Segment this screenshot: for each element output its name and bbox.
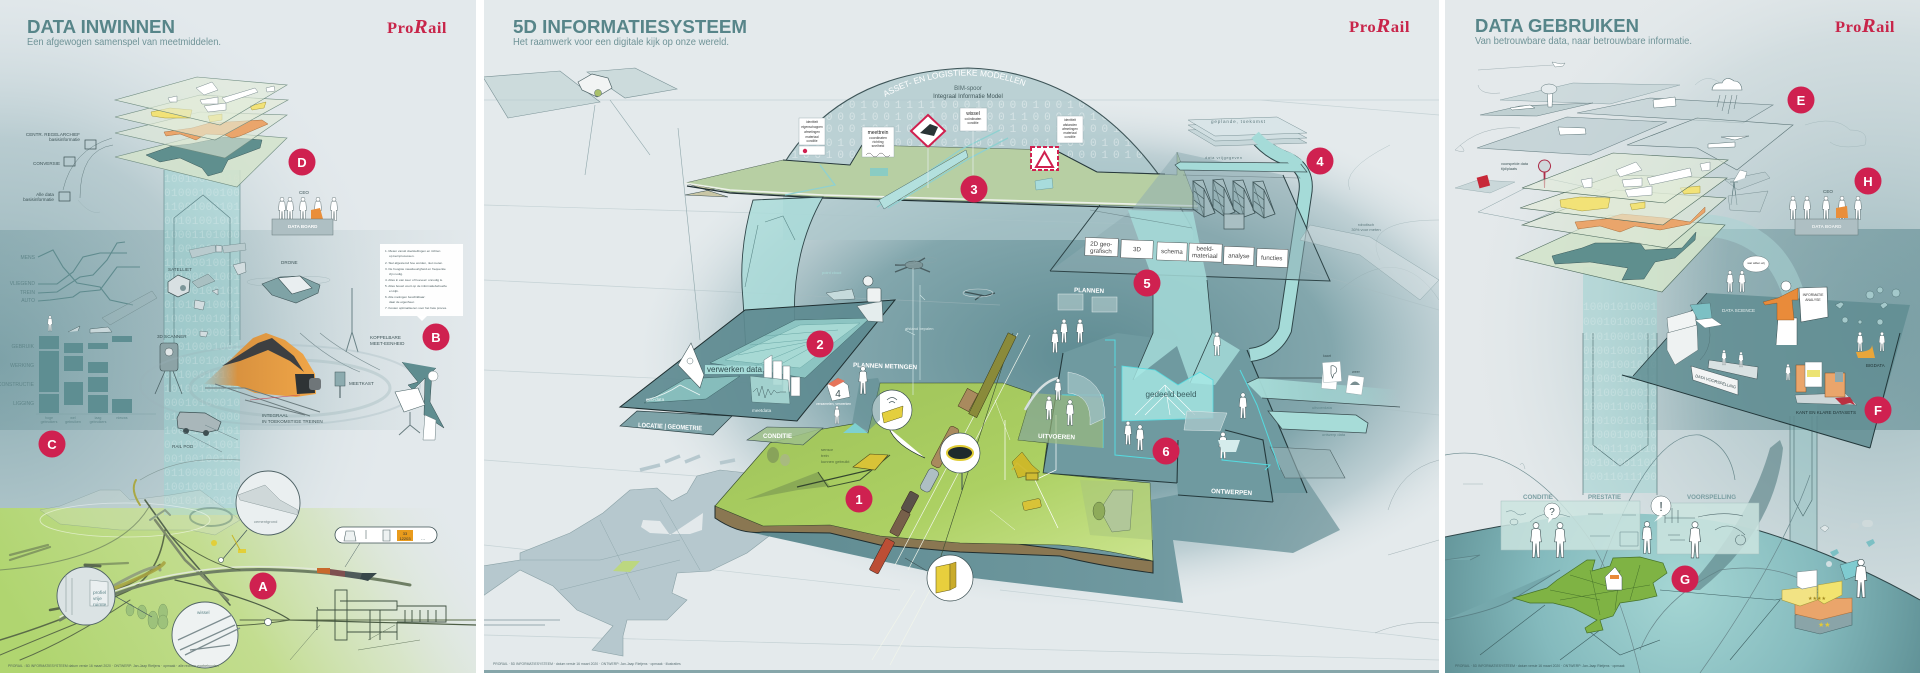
junction dot xyxy=(264,618,272,626)
note card: 1. Meten vanuit doelstellingen en richten xyxy=(385,249,441,253)
badge B: B xyxy=(431,330,441,345)
badge F: F xyxy=(1874,403,1882,418)
map and weather cards xyxy=(1321,354,1364,395)
city sketch xyxy=(40,490,240,537)
data board xyxy=(1789,189,1862,235)
icon: hazard diamond xyxy=(911,115,945,188)
bubble: question: ? xyxy=(1549,507,1555,518)
koppelbare meeteenheid: KOPPELBARE xyxy=(370,335,401,340)
panel: data gebruiken xyxy=(1445,0,1920,673)
magnifier: switch: wissel xyxy=(197,610,210,615)
bar chart: nieuws xyxy=(116,416,128,420)
shared picture zone xyxy=(1122,366,1227,431)
badge G: G xyxy=(1680,572,1690,587)
representation cards: schema xyxy=(1161,248,1183,256)
plannen group: PLANNEN xyxy=(1074,287,1105,295)
note card xyxy=(380,244,463,321)
badge D xyxy=(288,148,316,176)
ontwerpen: ONTWERPEN xyxy=(1211,488,1253,497)
dome with binary code: 1001000100100100100011000101001000101 xyxy=(780,112,1200,124)
icon: warning sign xyxy=(1031,147,1058,190)
bar chart: GEBRUIK xyxy=(11,344,35,350)
people at panels xyxy=(1531,522,1701,558)
uitvoeren: UITVOEREN xyxy=(1038,433,1076,441)
footer credit right: PRORAIL · 5D INFORMATIESYSTEEM · datum versie 16 maart 2020 · ONTWERP: Jan-Jaap Rietjens · opmaak xyxy=(1455,664,1625,668)
people in plan area xyxy=(1124,332,1270,470)
conversion sketch: basisinformatie xyxy=(49,137,80,142)
note card: 2. Stel afgestemd hoe worden, niet meten. xyxy=(385,261,443,265)
logo: prorail: ProRail xyxy=(1349,15,1410,37)
plan tiles area xyxy=(1043,333,1345,502)
title: data inwinnen: DATA INWINNEN xyxy=(27,16,175,37)
card: generic asset: afmetingen xyxy=(804,130,820,134)
sketches right xyxy=(1300,145,1439,633)
data columns: 10001010001 xyxy=(1583,302,1657,314)
data columns: 10000100010 xyxy=(1583,430,1657,442)
meetkast xyxy=(335,372,374,398)
dome with binary code: 0100100010010001011010001000101000110 xyxy=(780,150,1200,162)
ribbon 4 xyxy=(1250,136,1306,355)
data column with binary code: 01010010001 xyxy=(164,300,240,312)
terrain block: kunnen gebruikt xyxy=(821,459,850,464)
trees xyxy=(126,604,168,629)
badge 6: 6 xyxy=(1162,444,1170,459)
magnifier: profile xyxy=(57,567,152,625)
badge 4: 4 xyxy=(1316,154,1324,169)
data board xyxy=(272,190,338,235)
badge H: H xyxy=(1863,174,1873,189)
data column with binary code: 10001101000 xyxy=(164,230,240,242)
badge F xyxy=(1864,396,1892,424)
netherlands map ground xyxy=(483,456,773,656)
badge E xyxy=(1788,86,1814,114)
subtitle: data gebruiken: Van betrouwbare data, naar betrouwbare informatie. xyxy=(1475,35,1692,47)
data column with binary code: 00101010010 xyxy=(164,496,240,508)
location pin label: voorspelde data xyxy=(1501,162,1529,166)
data columns: 10010001001 xyxy=(1583,332,1657,344)
card: wissel: wissel xyxy=(966,111,980,117)
plate 2: processing: LOCATIE | GEOMETRIE xyxy=(638,422,703,432)
card: object details: materiaal xyxy=(1063,131,1077,135)
second drone xyxy=(963,289,995,300)
data columns: 00101001100 xyxy=(1583,458,1657,470)
data column with binary code: 01000100100 xyxy=(164,188,240,200)
conductor xyxy=(395,362,444,440)
data column with binary code: 10001000101 xyxy=(164,426,240,438)
badge C xyxy=(38,430,66,458)
terrain shadow xyxy=(740,470,1340,603)
data columns: 00001000101 xyxy=(1583,346,1657,358)
right arrow bars: ontwerp data xyxy=(1322,432,1346,437)
representation cards xyxy=(1085,237,1288,268)
card: object details: identiteit xyxy=(1064,118,1076,122)
representation cards: functies xyxy=(1261,255,1283,262)
left arrow of ribbon 4 xyxy=(1175,135,1307,172)
note card: 5. Alles bouwt voort op de informatiebehoefte xyxy=(385,284,447,288)
lego stack: ★★★★ xyxy=(1808,596,1826,602)
magnifier: soil xyxy=(218,471,300,562)
dome with binary code: 0101000100111100010000100100001001001 xyxy=(780,100,1200,112)
data columns: 10001100010 xyxy=(1583,402,1657,414)
line chart: VLIEGEND xyxy=(10,281,35,287)
note card: 7. Kosten optimaliseren voor het hele proces. xyxy=(385,306,447,310)
representation cards: analyse xyxy=(1228,252,1250,260)
dome heading: BIM-spoor xyxy=(954,86,982,92)
data columns: 10001001010 xyxy=(1583,360,1657,372)
data column with binary code: 01100001000 xyxy=(164,468,240,480)
card: generic asset xyxy=(799,118,825,155)
card: generic asset: materiaal xyxy=(805,135,819,139)
data column with binary code: 01001000101 xyxy=(164,244,240,256)
data columns: 01001110110 xyxy=(1583,444,1657,456)
drone: DRONE xyxy=(281,260,298,265)
data voorspelling desk: DATA VOORSPELLING xyxy=(1695,373,1737,390)
data columns: 00010100010 xyxy=(1583,317,1657,329)
data column with binary code: 00100011001 xyxy=(164,272,240,284)
plannen metingen: PLANNEN METINGEN xyxy=(853,362,917,371)
small towers xyxy=(1725,170,1770,212)
analysis panels: VOORSPELLING xyxy=(1687,494,1736,501)
track and train xyxy=(869,333,1030,665)
data column with binary code: 00100100011 xyxy=(164,328,240,340)
stacked documents xyxy=(1667,310,1698,365)
note card: 4. Alles in één keer of hoeveel: onnodig is. xyxy=(385,278,443,282)
data column with binary code: 00100010100 xyxy=(164,370,240,382)
bubble: exclamation xyxy=(1651,496,1671,522)
layered data stack xyxy=(115,77,288,187)
presenter: ANALYSE xyxy=(1805,298,1821,302)
magnifier: switch xyxy=(172,602,240,668)
plate 2: processing xyxy=(620,300,895,445)
card: generic asset: conditie xyxy=(806,139,818,143)
bubble: question xyxy=(1544,503,1560,523)
dome with binary code: 0001000101100100010010001000010010010 xyxy=(780,124,1200,136)
context data planes xyxy=(1455,62,1866,222)
conversion sketch xyxy=(23,132,113,212)
right arrow bars xyxy=(1247,378,1400,437)
sketches right: 30% voor meten xyxy=(1351,227,1381,232)
line chart: MENS xyxy=(21,255,36,261)
magnifier: profile: ruimte xyxy=(93,602,107,608)
badge 1 xyxy=(846,486,872,512)
location pin label xyxy=(1501,160,1550,188)
big data people: BIGDATA xyxy=(1866,363,1885,368)
data column with binary code: 11000100101 xyxy=(164,286,240,298)
plate 5: representation xyxy=(1050,152,1330,385)
note card: zijn nodig. xyxy=(389,272,403,276)
sensor legend pill: 12203 xyxy=(399,536,411,541)
dome with binary code: 1010010010001001000100011000101010001 xyxy=(780,138,1200,150)
terrain block: trein xyxy=(821,453,829,458)
badge E: E xyxy=(1797,93,1806,108)
data column with binary code: 10010001100 xyxy=(164,482,240,494)
subtitle: data inwinnen: Een afgewogen samenspel van meetmiddelen. xyxy=(27,36,221,48)
card: wissel: coördinaten xyxy=(965,117,982,121)
satellite xyxy=(483,68,700,340)
layered data stack xyxy=(1516,153,1728,292)
location pin label: tijd/plaats xyxy=(1501,167,1517,171)
bar chart: hoge xyxy=(45,416,53,420)
rail pod xyxy=(172,412,238,452)
logo: prorail: ProRail xyxy=(387,16,447,38)
robot and drone: afstand bepalen xyxy=(905,326,933,331)
3d scanner: 3D SCANNER xyxy=(157,334,187,339)
bar chart: LIGGING xyxy=(13,401,34,407)
representation cards: grafisch xyxy=(1090,248,1112,255)
magnifier: profile: vrije xyxy=(93,596,102,602)
dome with binary code xyxy=(780,68,1200,240)
note card: en kijk. xyxy=(389,289,399,293)
sensor legend pill: ... xyxy=(421,536,425,542)
use plate xyxy=(1622,256,1910,448)
subtitle: 5d informatiesysteem: Het raamwerk voor een digitale kijk op onze wereld. xyxy=(513,36,729,48)
robot and drone: point cloud xyxy=(822,270,841,275)
plate 2: processing: CONDITIE xyxy=(763,433,793,440)
right arrow bars: uitvoerdata xyxy=(1312,405,1333,410)
representation cards: 2D geo- xyxy=(1090,241,1112,248)
plate 2: processing: verwerken data xyxy=(707,365,763,374)
data column with binary code: 00100100101 xyxy=(164,454,240,466)
card: object details: afstanden xyxy=(1063,123,1077,127)
card: meettrein: coordinaten xyxy=(869,136,887,140)
badge 2 xyxy=(806,330,834,358)
uitvoeren xyxy=(1018,372,1105,448)
card: wissel xyxy=(960,108,987,175)
card: generic asset: identiteit xyxy=(806,120,818,124)
dome heading: Integraal Informatie Model xyxy=(933,94,1003,100)
ready datasets: KANT EN KLARE DATASETS xyxy=(1796,410,1856,415)
label: data science: DATA SCIENCE xyxy=(1722,308,1755,313)
bar chart: gebruiken xyxy=(65,420,81,424)
conversion sketch: Alle data xyxy=(36,192,54,197)
badge H xyxy=(1854,168,1882,194)
data column with binary code: 10010001001 xyxy=(164,342,240,354)
badge 3 xyxy=(960,176,988,202)
card: wissel: conditie xyxy=(968,121,979,125)
presenter: INFORMATIE xyxy=(1803,293,1824,297)
data board: DATA BOARD xyxy=(288,224,318,229)
bar chart xyxy=(0,316,156,424)
ready datasets xyxy=(1786,362,1857,415)
laptop xyxy=(1690,303,1722,328)
data column with binary code: 10001001010 xyxy=(164,314,240,326)
card: object details: afmetingen xyxy=(1062,127,1078,131)
left arch ribbon xyxy=(742,197,823,350)
conversion sketch: CONVERSIE xyxy=(33,161,60,166)
satellite: SATELLIET xyxy=(168,267,192,272)
line chart xyxy=(10,242,140,305)
badge 5 xyxy=(1134,270,1160,296)
plannen metingen: verzamelen, verwerken xyxy=(816,402,851,406)
badge 6 xyxy=(1152,438,1180,464)
map and weather cards: weer xyxy=(1352,370,1361,374)
panel: 5d informatiesysteem xyxy=(484,0,1439,673)
card: meettrein xyxy=(862,127,894,157)
card: object details xyxy=(1057,116,1083,143)
panel: data inwinnen xyxy=(0,0,476,673)
data column with binary code: 00010100010 xyxy=(164,398,240,410)
koppelbare meeteenheid: MEET-EENHEID xyxy=(370,341,405,346)
note card: 3. De hoogste nauwkeurigheid en frequentie xyxy=(385,267,446,271)
small yellow machines xyxy=(211,535,246,553)
data columns: 01000100111 xyxy=(1583,374,1657,386)
lego stack: ★★ xyxy=(1818,621,1831,629)
data column with binary code: 00101001001 xyxy=(164,216,240,228)
data column with binary code xyxy=(164,170,240,515)
big data social icons xyxy=(1835,287,1900,325)
analysis panels: CONDITIE xyxy=(1523,494,1554,501)
badge B xyxy=(422,324,450,350)
terrain block: sensor xyxy=(821,447,834,452)
footer credit left: PRORAIL : 5D INFORMATIESYSTEEM datum versie 16 maart 2020 · ONTWERP: Jan-Jaap Rietjens · opmaak · alle rechten voorbehouden xyxy=(8,664,219,668)
note card: daar de eigenheer. xyxy=(389,300,415,304)
robot and drone xyxy=(822,257,937,395)
data arch ribbon xyxy=(1695,225,1795,300)
data board: CEO xyxy=(299,190,309,195)
card: meettrein: snelheid xyxy=(872,144,884,148)
representation cards: materiaal xyxy=(1192,252,1218,260)
train orange xyxy=(140,333,420,425)
data columns: 00010010101 xyxy=(1583,416,1657,428)
title: 5d informatiesysteem: 5D INFORMATIESYSTEEM xyxy=(513,16,747,37)
map and weather cards: kaart xyxy=(1323,354,1331,358)
bubble: exclamation: ! xyxy=(1659,499,1663,514)
sensor legend pill xyxy=(335,527,437,567)
card: object details: conditie xyxy=(1064,135,1076,139)
representation cards: beeld- xyxy=(1196,245,1214,253)
representation cards: 3D xyxy=(1133,246,1142,253)
badge D: D xyxy=(297,155,307,170)
data column with binary code: 10100100011 xyxy=(164,384,240,396)
sensor legend pill: 33 xyxy=(403,531,408,536)
social icons right xyxy=(1820,520,1875,567)
data board: DATA BOARD xyxy=(1812,224,1842,229)
note card: op kernprocessen. xyxy=(389,254,415,258)
data columns xyxy=(1583,267,1817,601)
data column with binary code: 11001000101 xyxy=(164,202,240,214)
bubble: discussion: wat willen wij xyxy=(1747,261,1765,265)
plannen metingen xyxy=(816,362,917,433)
title: data gebruiken: DATA GEBRUIKEN xyxy=(1475,15,1639,36)
viaduct and tracks xyxy=(0,459,476,660)
presenter xyxy=(1763,281,1828,345)
line chart: AUTO xyxy=(21,298,35,304)
plannen metingen: 4 xyxy=(835,389,841,400)
callout: sensor wifi xyxy=(872,390,925,458)
magnifier: profile: profiel xyxy=(93,590,106,596)
lego stack xyxy=(1782,559,1867,634)
bar chart: gebruikers xyxy=(90,420,107,424)
line chart: TREIN xyxy=(20,290,35,296)
data columns: 10011011100 xyxy=(1583,472,1657,484)
analysis panels xyxy=(1501,494,1759,554)
excavator xyxy=(1012,463,1038,480)
badge 5: 5 xyxy=(1143,276,1151,291)
top green plate xyxy=(685,130,1198,210)
badge G xyxy=(1672,566,1698,592)
badge 2: 2 xyxy=(816,337,824,352)
badge 4 xyxy=(1306,148,1334,174)
train orange: INTEGRAAL xyxy=(262,413,288,418)
3d scanner xyxy=(155,334,187,394)
note card: 6. Alle metingen beschikbaar: xyxy=(385,295,426,299)
data column with binary code: 01001001000 xyxy=(164,412,240,424)
satellite xyxy=(102,243,246,337)
data column with binary code: 10010001010 xyxy=(164,174,240,186)
footer credit center: PRORAIL · 5D INFORMATIESYSTEEM · datum versie 16 maart 2020 · ONTWERP: Jan-Jaap Rietjens · opmaak · illustraties xyxy=(493,662,681,666)
big data people xyxy=(1856,332,1885,368)
station building xyxy=(290,590,446,660)
badge C: C xyxy=(47,437,57,452)
card: generic asset: eigenschappen xyxy=(801,125,823,129)
plate 2: processing: geo-data xyxy=(646,397,665,402)
plannen group xyxy=(1051,287,1117,366)
badge A xyxy=(250,572,276,600)
freight train xyxy=(317,568,377,581)
bar chart: laag xyxy=(95,416,101,420)
magnifier: soil: cementgrond xyxy=(254,519,277,524)
terrain block xyxy=(715,383,1153,573)
callout: yellow block xyxy=(905,555,973,601)
badge 3: 3 xyxy=(970,182,978,197)
badge A: A xyxy=(258,579,268,594)
data board: CEO xyxy=(1823,189,1833,194)
card: meettrein: richting xyxy=(873,140,884,144)
file cabinets xyxy=(1193,179,1275,229)
train orange: IN TOEKOMSTIGE TREINEN xyxy=(262,419,323,424)
shared picture zone: gedeeld beeld xyxy=(1146,390,1196,399)
paper stack: data vrijgegeven xyxy=(1205,155,1242,160)
meetkast: MEETKAST xyxy=(349,381,374,386)
bubble: discussion xyxy=(1727,256,1769,292)
callout: eye sensor xyxy=(940,433,980,490)
data voorspelling desk xyxy=(1691,350,1758,395)
logo: prorail: ProRail xyxy=(1835,15,1895,37)
dome heading: ASSET- EN LOGISTIEKE MODELLEN xyxy=(884,70,1026,97)
conversion sketch: basisinformatie xyxy=(23,197,54,202)
data columns: 00100010010 xyxy=(1583,388,1657,400)
analysis panels: PRESTATIE xyxy=(1588,494,1622,501)
data column with binary code: 10100010010 xyxy=(164,258,240,270)
globe xyxy=(1445,435,1920,673)
conversion sketch: CENTR. REGELARCHIEF xyxy=(26,132,80,137)
sketches right: robotisch xyxy=(1358,222,1374,227)
rail pod: RAIL POD xyxy=(172,444,194,449)
drone xyxy=(247,260,330,303)
plate 2: processing: meetdata xyxy=(752,408,772,413)
koppelbare meeteenheid xyxy=(300,288,405,372)
badge 1: 1 xyxy=(855,492,863,507)
data column with binary code: 01001010001 xyxy=(164,356,240,368)
bar chart: wel xyxy=(70,416,76,420)
card: meettrein: meettrein xyxy=(868,130,889,136)
paper stack: geplande, toekomst xyxy=(1211,119,1266,124)
data column with binary code: 00100011001 xyxy=(164,440,240,452)
paper stack xyxy=(1188,117,1307,160)
bar chart: gebruikers xyxy=(41,420,58,424)
bar chart: WERKING xyxy=(10,363,34,369)
netherlands green xyxy=(1513,557,1667,633)
